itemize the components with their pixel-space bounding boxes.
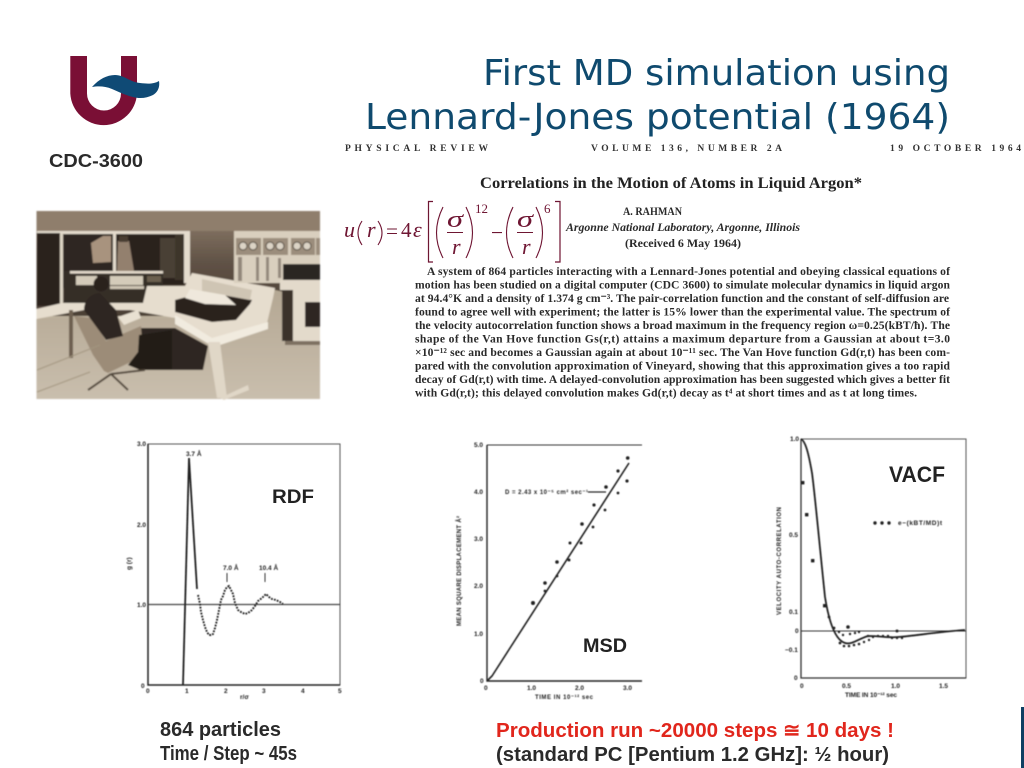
text: system details: Time / Step ~ 45s [160, 743, 297, 765]
right machine [283, 264, 320, 280]
abstract text: with Gd(r,t); this delayed convolution makes Gd(r,t) decay as t⁴ at short times and as t at long times. [415, 386, 917, 400]
chart: RDF: 2.0 [137, 522, 146, 529]
chart: RDF: 3.0 [137, 441, 146, 448]
abstract text: the velocity autocorrelation function shows a broad maximum in the frequency region ω=0.25(kBT/ħ). The [415, 319, 950, 332]
abstract text: pared with the convolution approximation of Vineyard, showing that this approximation gives a too rapid [415, 360, 951, 372]
chart: VACF: 0 [794, 675, 798, 682]
chart: RDF: 3.7 Å [186, 449, 202, 458]
journal masthead: PHYSICAL REVIEW [345, 144, 488, 154]
desk [36, 273, 275, 342]
abstract text: motion has been studied on a digital computer (CDC 3600) to simulate molecular dynamics in liquid argon [415, 278, 951, 292]
chart: MSD: MEAN SQUARE DISPLACEMENT Å² [456, 516, 463, 626]
chart: MSD: 0 [484, 685, 488, 692]
abstract text [415, 265, 951, 400]
abstract text: A system of 864 particles interacting with a Lennard-Jones potential and obeying classical equations of [427, 265, 950, 278]
author block: Argonne National Laboratory, Argonne, Illinois [565, 222, 801, 234]
chart: MSD: D = 2.43 x 10⁻⁵ cm² sec⁻¹ [505, 489, 588, 496]
chart: RDF: r/σ [240, 694, 249, 701]
chart: VACF: 0 [800, 683, 804, 690]
chart: MSD: 1.0 [474, 631, 483, 638]
chart: MSD: 2.0 [575, 685, 584, 692]
text: production run [496, 720, 894, 766]
equation: Lennard-Jones potential: r [452, 234, 461, 259]
chart: RDF [126, 441, 342, 701]
author block [565, 206, 801, 250]
equation: Lennard-Jones potential: r [522, 234, 531, 259]
text: production run: Production run ~20000 steps ≅ 10 days ! [496, 720, 894, 742]
chart: MSD: 3.0 [623, 685, 632, 692]
label: RDF: RDF [272, 487, 314, 508]
title [365, 53, 950, 138]
abstract text: shape of the Van Hove function Gs(r,t) attains a maximum departure from a Gaussian at about t=3.0 [415, 332, 950, 346]
chart: RDF: 3 [262, 688, 266, 695]
chart: RDF: 1.0 [137, 602, 146, 609]
chart: VACF: 1.0 [891, 683, 900, 690]
chart: VACF [777, 436, 966, 699]
chart: RDF: 1 [185, 688, 189, 695]
chart: VACF: e−(kBT/MD)t [898, 520, 943, 527]
chart: MSD: 2.0 [474, 583, 483, 590]
photo: CDC-3600 computer room [36, 211, 320, 400]
chart: MSD [456, 442, 642, 701]
logo: university U with wave [70, 56, 159, 125]
text: system details: 864 particles [160, 719, 281, 741]
journal masthead [345, 144, 1021, 154]
title: Lennard-Jones potential (1964) [365, 97, 950, 138]
equation: Lennard-Jones potential: σ [517, 207, 535, 233]
author block: A. RAHMAN [623, 206, 683, 218]
abstract text: decay of Gd(r,t) with time. A delayed-convolution approximation has been suggested which gives a better fit [415, 373, 950, 386]
chart: VACF: VELOCITY AUTO-CORRELATION [777, 507, 783, 615]
footer accent bar [1021, 707, 1024, 768]
text: system details [160, 719, 297, 765]
chart: VACF: 0.1 [789, 609, 798, 616]
equation: Lennard-Jones potential: ε [413, 217, 422, 242]
author block: (Received 6 May 1964) [625, 236, 741, 250]
label: MSD: MSD [583, 636, 627, 657]
chart: RDF: 7.0 Å [223, 563, 239, 572]
chart: VACF: 0 [795, 628, 799, 635]
chart: RDF: 10.4 Å [259, 563, 278, 572]
abstract text: at 94.4°K and a density of 1.374 g cm⁻³. The pair-correlation function and the constant of self-diffusion are [415, 292, 949, 305]
chart: VACF: TIME IN 10⁻¹² sec [845, 692, 897, 699]
chart: MSD: 1.0 [527, 685, 536, 692]
title: First MD simulation using [483, 53, 950, 94]
chart: RDF: 0 [146, 688, 150, 695]
label: CDC-3600: CDC-3600 [49, 151, 143, 171]
chart: RDF: g (r) [126, 557, 133, 570]
chart: MSD: 5.0 [474, 442, 483, 449]
equation: Lennard-Jones potential: r [367, 217, 376, 242]
equation: Lennard-Jones potential: 12 [475, 201, 488, 216]
equation: Lennard-Jones potential: 4 [401, 218, 412, 242]
equation: Lennard-Jones potential: = [386, 219, 398, 243]
chart: VACF: 0.5 [789, 532, 798, 539]
text: production run: (standard PC [Pentium 1.2 GHz]: ½ hour) [496, 744, 889, 766]
chart: RDF: 5 [338, 688, 342, 695]
operator and chair [74, 316, 143, 373]
equation: Lennard-Jones potential: u [344, 217, 355, 242]
chart: RDF: 4 [301, 688, 305, 695]
tape units [234, 231, 320, 283]
abstract text: ×10⁻¹² sec and becomes a Gaussian again at about 10⁻¹¹ sec. The Van Hove function Gd(r,t) has been com- [415, 346, 950, 359]
abstract text: found to agree well with experiment; the latter is 15% lower than the experimental value. The spectrum of [415, 306, 950, 318]
chart: VACF: 1.0 [790, 436, 799, 443]
chart: VACF: 0.5 [842, 683, 851, 690]
equation: Lennard-Jones potential: σ [447, 207, 465, 233]
label: VACF: VACF [889, 462, 945, 487]
chart: MSD: 4.0 [474, 489, 483, 496]
chart: VACF: −0.1 [785, 647, 798, 654]
chart: MSD: TIME IN 10⁻¹² sec [535, 694, 594, 701]
equation: Lennard-Jones potential [344, 201, 560, 262]
chart: VACF: 1.5 [939, 683, 948, 690]
journal masthead: 19 OCTOBER 1964 [890, 144, 1021, 154]
chart: RDF: 2 [224, 688, 228, 695]
journal masthead: VOLUME 136, NUMBER 2A [591, 144, 782, 154]
article title: Correlations in the Motion of Atoms in Liquid Argon* [480, 175, 862, 192]
equation: Lennard-Jones potential: 6 [544, 201, 551, 216]
chart: RDF: 0 [141, 683, 145, 690]
chart: MSD: 3.0 [474, 536, 483, 543]
chart: MSD: 0 [480, 678, 484, 685]
